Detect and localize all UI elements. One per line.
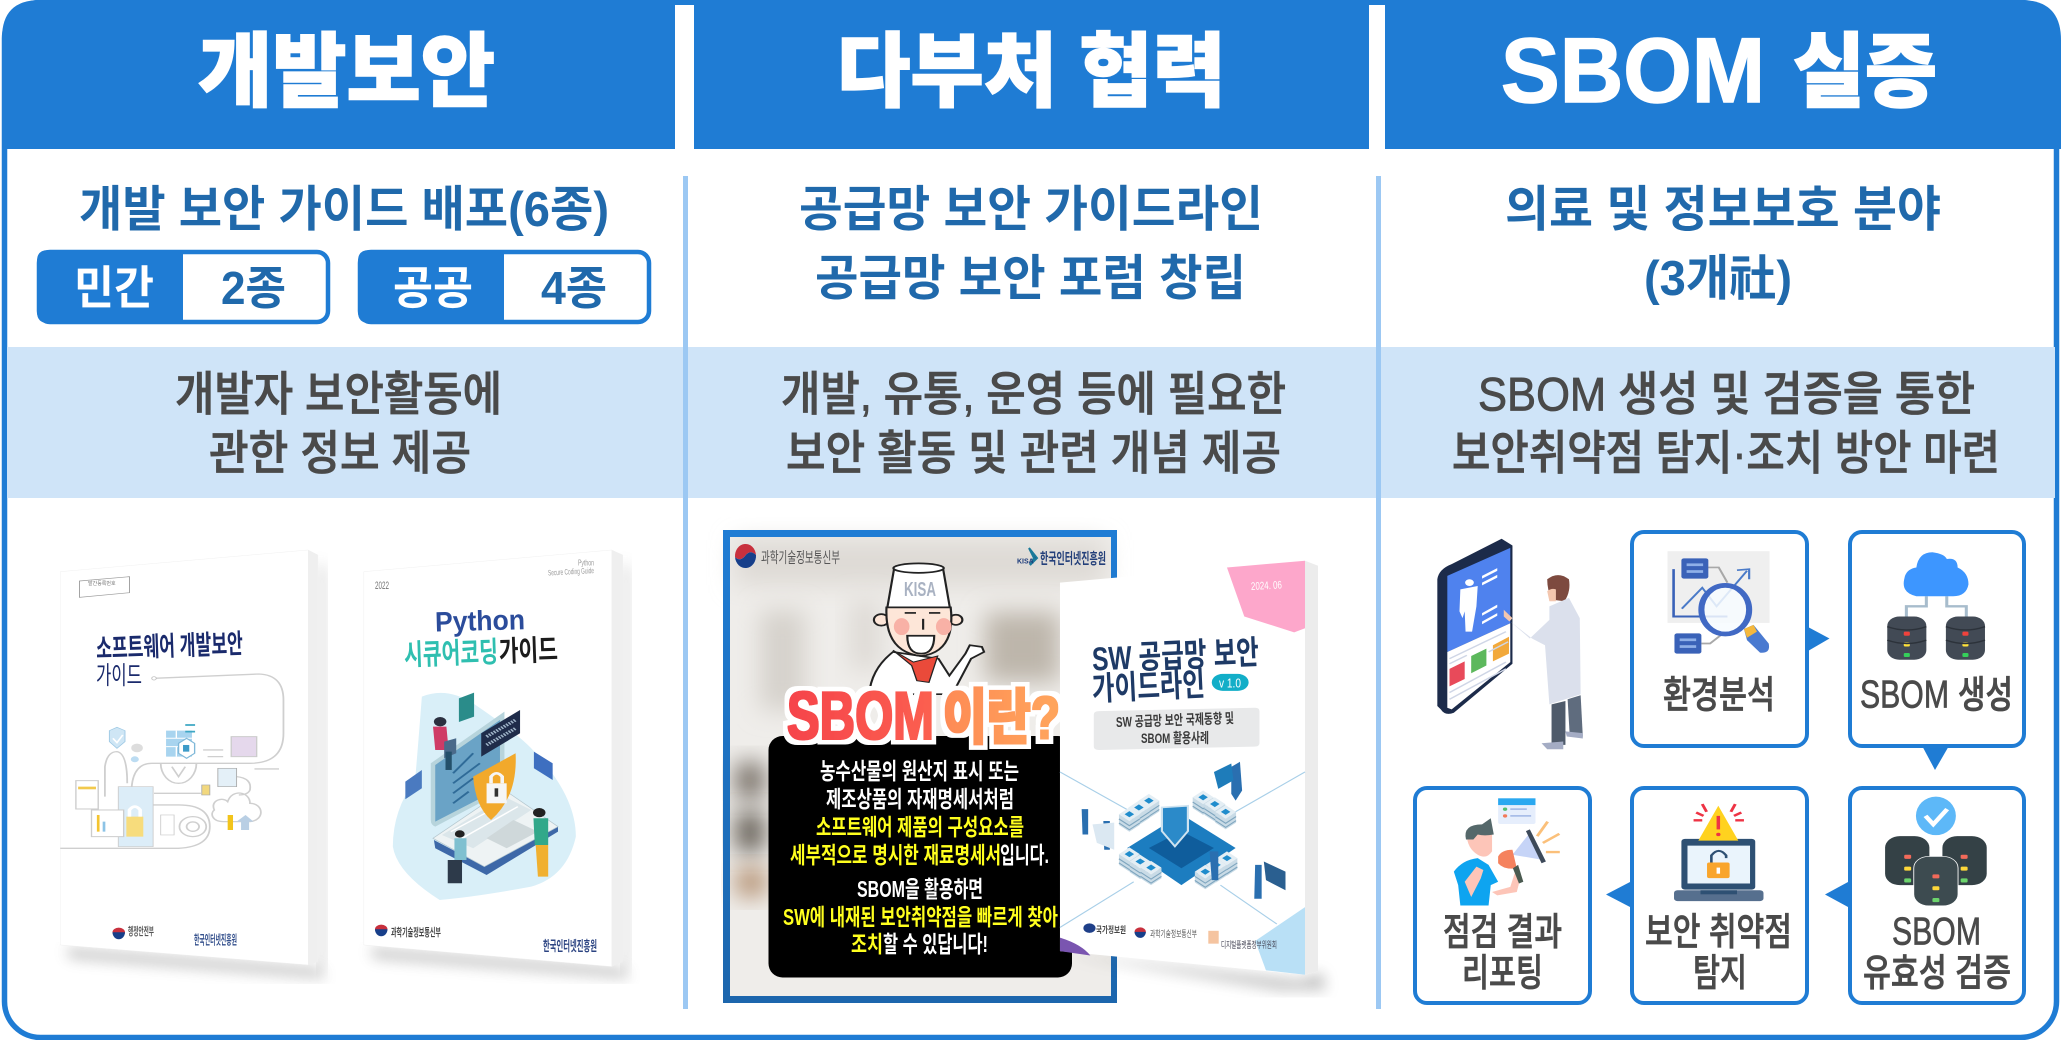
band text: column 1: 개발자 보안활동에: [175, 368, 502, 420]
illustration: chef character: [869, 563, 984, 694]
card: SBOM 생성: [1850, 532, 2024, 746]
arrow: left 2: [1606, 882, 1630, 907]
book: SW 공급망 보안 가이드라인: 가이드라인: [1091, 665, 1206, 707]
info box: SBOM description: 소프트웨어 제품의 구성요소를: [816, 814, 1024, 840]
card: 보안 취약점 탐지: 보안 취약점: [1645, 912, 1792, 954]
heading: SBOM 실증: [1501, 20, 1937, 122]
poster title: SBOM 이란?: 이란?: [943, 684, 1060, 752]
pill: 공공 4종: [358, 250, 649, 323]
card: 환경분석: 환경분석: [1663, 675, 1775, 717]
book: SW 공급망 보안 가이드라인: 디지털플랫폼정부위원회: [1221, 939, 1277, 950]
book: Python 시큐어코딩 가이드: Secure Coding Guide: [548, 566, 594, 577]
info box: SBOM description: 제조상품의 자재명세서처럼: [826, 786, 1014, 812]
arrow: left 1: [1825, 882, 1848, 907]
card: 점검 결과 리포팅: [1415, 788, 1590, 1003]
subtitle: column 3: (3개社): [1644, 252, 1792, 306]
illustration: doctor with phone: [1437, 539, 1583, 749]
info box: SBOM description: 입니다.: [1000, 842, 1049, 868]
band text: column 3: SBOM 생성 및 검증을 통한: [1478, 368, 1975, 420]
pill: 민간 2종: [37, 250, 328, 323]
book: SW 공급망 보안 가이드라인: 국가정보원: [1096, 924, 1126, 935]
book: 소프트웨어 개발보안 가이드: 소프트웨어 개발보안: [95, 629, 244, 664]
book: Python 시큐어코딩 가이드: Python: [435, 604, 525, 637]
band text: column 2: [781, 368, 1286, 480]
card: 보안 취약점 탐지: [1632, 788, 1807, 1003]
band text: column 2: 개발, 유통, 운영 등에 필요한: [781, 368, 1286, 420]
poster: SBOM 이란: [723, 530, 1117, 1003]
column divider right: [1376, 176, 1381, 1009]
header band: [2, 0, 2061, 149]
icon: cloud and servers: [1887, 552, 1985, 660]
info box: SBOM description: 조치: [851, 931, 883, 957]
heading: SBOM 실증: SBOM: [1501, 20, 1765, 122]
icon: alert over laptop: [1674, 804, 1763, 901]
icon: person with megaphone: [1454, 798, 1560, 905]
book: Python 시큐어코딩 가이드: 가이드: [498, 634, 558, 669]
book: SW 공급망 보안 가이드라인: [1060, 561, 1326, 990]
book: 소프트웨어 개발보안 가이드: 가이드: [96, 662, 142, 690]
illustration: chef character: KISA: [904, 579, 936, 601]
card: SBOM 유효성 검증: 유효성 검증: [1863, 953, 2011, 995]
subtitle: column 2: [799, 183, 1263, 306]
subtitle: column 1: 개발 보안 가이드 배포(6종): [79, 183, 609, 237]
book: 소프트웨어 개발보안 가이드: 행정안전부: [128, 924, 154, 938]
card: 환경분석: [1632, 532, 1807, 746]
card: 보안 취약점 탐지: 탐지: [1693, 953, 1747, 995]
book: Python 시큐어코딩 가이드: [364, 550, 630, 978]
book: SW 공급망 보안 가이드라인: SW 공급망 보안: [1091, 634, 1260, 677]
pill: 민간 2종: 2종: [221, 262, 286, 314]
pill: 공공 4종: 4종: [541, 262, 607, 314]
book: Python 시큐어코딩 가이드: 과학기술정보통신부: [391, 925, 441, 939]
subtitle: column 3: 의료 및 정보보호 분야: [1505, 183, 1941, 237]
poster: SBOM 이란: 한국인터넷진흥원: [1040, 550, 1106, 568]
band text: column 3: [1452, 368, 2000, 480]
card: SBOM 생성: 생성: [1958, 675, 2013, 717]
column divider left: [683, 176, 688, 1009]
info box: SBOM description: SBOM을 활용하면: [857, 876, 983, 902]
poster title: SBOM 이란?: SBOM: [787, 678, 934, 754]
info box: SBOM description: SW에 내재된 보안취약점을 빠르게 찾아: [783, 904, 1058, 930]
book: Python 시큐어코딩 가이드: 2022: [375, 580, 389, 592]
pill: 민간 2종: 민간: [74, 262, 154, 314]
subtitle: column 2: 공급망 보안 가이드라인: [799, 183, 1263, 237]
book: 소프트웨어 개발보안 가이드: 발간등록번호: [88, 580, 116, 587]
poster: SBOM 이란: 과학기술정보통신부: [761, 550, 840, 566]
poster: SBOM 이란: KISA: [1017, 558, 1034, 566]
heading: 개발보안: 개발보안: [198, 28, 495, 118]
pill: 공공 4종: 공공: [393, 262, 473, 314]
card: SBOM 유효성 검증: SBOM: [1892, 910, 1981, 954]
book: 소프트웨어 개발보안 가이드: 한국인터넷진흥원: [194, 932, 237, 948]
book: SW 공급망 보안 가이드라인: 과학기술정보통신부: [1150, 929, 1197, 939]
info box: SBOM description: 할 수 있답니다!: [883, 931, 988, 957]
arrow: right: [1808, 627, 1830, 651]
arrow: down: [1923, 748, 1948, 770]
book: 소프트웨어 개발보안 가이드: [60, 550, 326, 978]
icon: magnifier over chart: [1668, 551, 1770, 654]
info box: SBOM description: 세부적으로 명시한 재료명세서: [790, 842, 1001, 868]
band text: column 1: 관한 정보 제공: [209, 426, 471, 480]
band text: column 2: 보안 활동 및 관련 개념 제공: [786, 426, 1281, 480]
band text: column 3: 보안취약점 탐지·조치 방안 마련: [1452, 426, 2000, 480]
heading: 다부처 협력: 다부처 협력: [837, 28, 1226, 118]
card: SBOM 생성: SBOM: [1860, 674, 1949, 716]
card: 점검 결과 리포팅: 점검 결과: [1443, 912, 1562, 954]
book: Python 시큐어코딩 가이드: 시큐어코딩: [403, 636, 499, 672]
card: 점검 결과 리포팅: 리포팅: [1462, 953, 1543, 995]
light blue band: [7, 347, 2055, 498]
band text: column 1: [175, 368, 502, 480]
book: Python 시큐어코딩 가이드: 한국인터넷진흥원: [543, 938, 597, 954]
book: SW 공급망 보안 가이드라인: SW 공급망 보안 국제동향 및: [1116, 710, 1234, 730]
heading: SBOM 실증: 실증: [1793, 28, 1937, 118]
info box: SBOM description: 농수산물의 원산지 표시 또는: [820, 758, 1019, 784]
info box: SBOM description: [768, 736, 1072, 978]
subtitle: column 3: [1505, 183, 1941, 306]
subtitle: column 2: 공급망 보안 포럼 창립: [815, 252, 1246, 306]
book: SW 공급망 보안 가이드라인: SBOM 활용사례: [1141, 730, 1209, 746]
icon: verified database: [1885, 797, 1987, 906]
card: SBOM 유효성 검증: [1850, 788, 2024, 1003]
book: SW 공급망 보안 가이드라인: v 1.0: [1219, 676, 1241, 690]
book: Python 시큐어코딩 가이드: Python: [578, 558, 594, 568]
book: SW 공급망 보안 가이드라인: 2024. 06: [1251, 579, 1282, 593]
